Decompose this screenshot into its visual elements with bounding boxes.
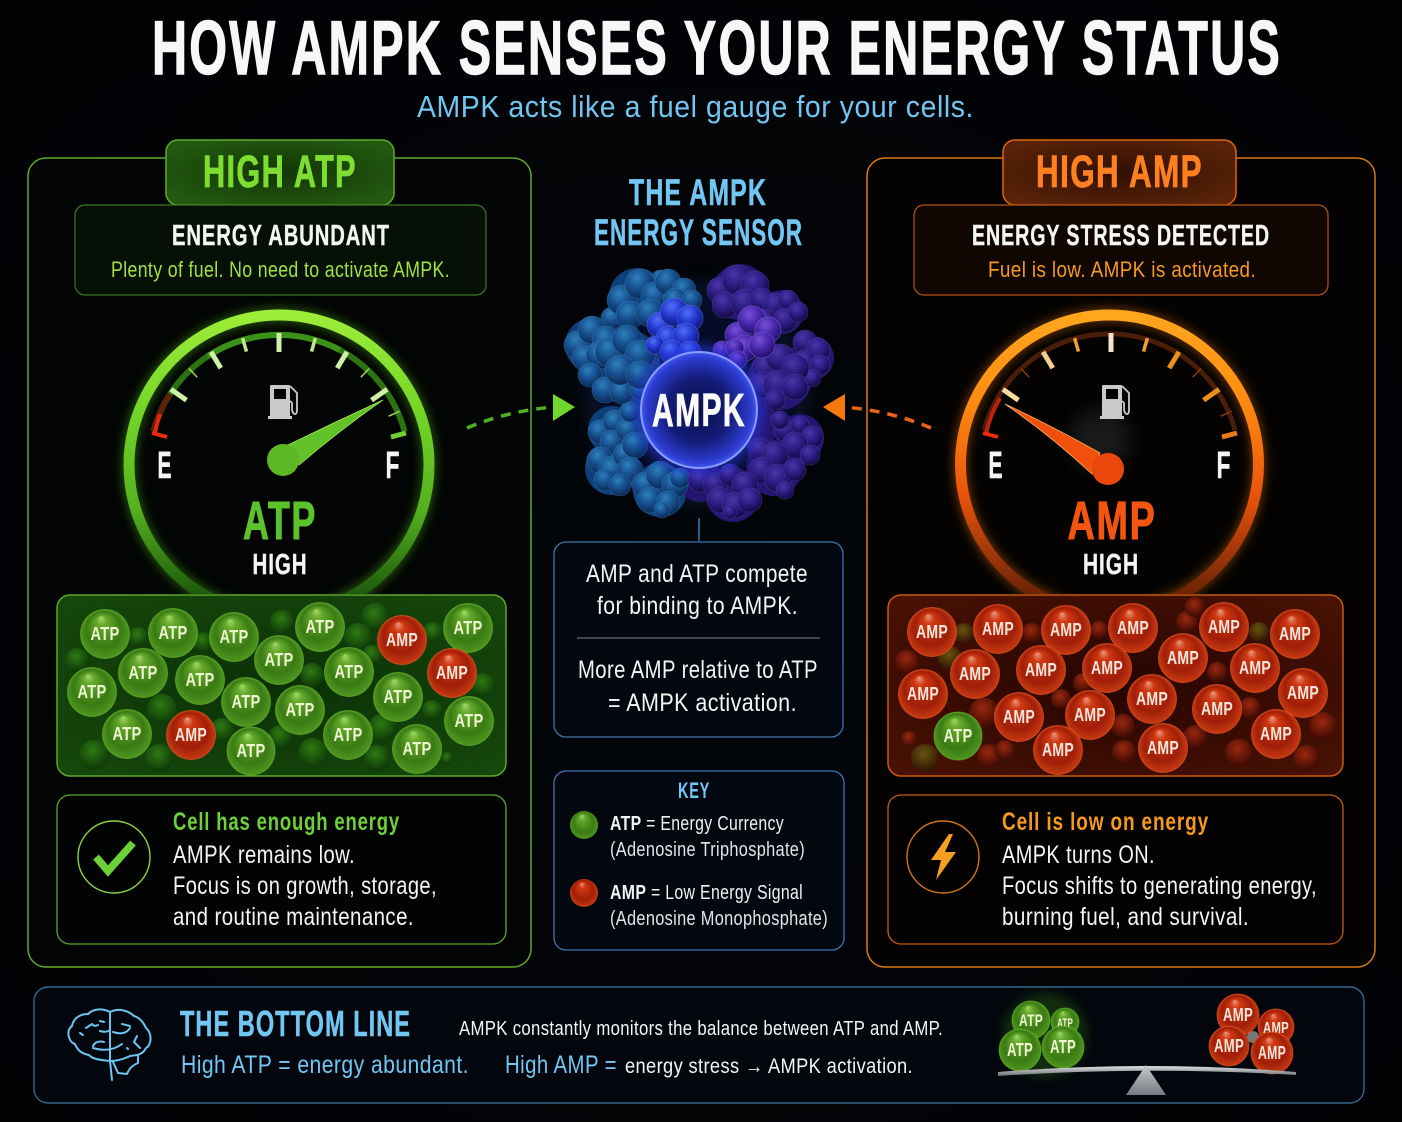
ATP dominated molecule pool: ATP (78, 682, 106, 702)
ATP dominated molecule pool: ATP (334, 725, 362, 745)
ATP dominated molecule pool: ATP (454, 618, 482, 638)
status box: cell is low on energy: burning fuel, and survival. (1002, 903, 1249, 931)
icon: brain (68, 1009, 151, 1080)
ATP dominated molecule pool (57, 595, 506, 776)
status box: cell is low on energy: Cell is low on energy (1002, 808, 1209, 836)
AMP dominated molecule pool: AMP (1074, 705, 1106, 725)
callout: energy stress detected: Fuel is low. AMPK is activated. (988, 257, 1256, 282)
AMP dominated molecule pool: AMP (1287, 683, 1319, 703)
arrow: ATP signal to AMPK (467, 394, 575, 428)
AMP dominated molecule pool: AMP (1147, 738, 1179, 758)
ATP dominated molecule pool: ATP (306, 617, 334, 637)
callout: energy abundant: Plenty of fuel. No need to activate AMPK. (111, 257, 450, 282)
panel: the bottom line (34, 987, 1364, 1103)
heading tab: HIGH AMP (1003, 140, 1236, 205)
ATP dominated molecule pool: ATP (128, 663, 158, 683)
status box: cell has enough energy: Focus is on growth, storage, (173, 872, 437, 900)
status box: cell is low on energy (888, 795, 1343, 944)
panel: the bottom line: THE BOTTOM LINE (180, 1003, 411, 1044)
center heading: ENERGY SENSOR (594, 212, 803, 253)
subtitle: AMPK acts like a fuel gauge for your cells. (417, 89, 974, 124)
AMP dominated molecule pool: AMP (1279, 624, 1311, 644)
panel: high ATP (28, 140, 531, 967)
ATP dominated molecule pool: ATP (158, 623, 188, 643)
ATP dominated molecule pool: ATP (90, 624, 120, 644)
icon: lightning bolt (907, 821, 979, 893)
AMP dominated molecule pool: AMP (1117, 618, 1149, 638)
AMP dominated molecule pool: AMP (1136, 689, 1168, 709)
info box: AMP and ATP compete: More AMP relative to ATP (578, 656, 818, 684)
heading tab: HIGH ATP (166, 140, 394, 205)
ATP dominated molecule pool: ATP (232, 692, 260, 712)
heading tab: HIGH ATP: HIGH ATP (203, 146, 357, 197)
gauge: AMP high: AMP (1068, 491, 1156, 551)
legend item: AMP: AMP = Low Energy Signal (610, 882, 803, 904)
legend item: ATP (570, 811, 805, 861)
AMP dominated molecule pool: AMP (982, 619, 1014, 639)
gauge: ATP high (129, 315, 429, 615)
ATP dominated molecule pool: ATP (384, 687, 412, 707)
center heading (594, 172, 803, 253)
info box: AMP and ATP compete (554, 542, 843, 737)
balance scale: ATP (1057, 1016, 1073, 1030)
AMP dominated molecule pool (888, 595, 1343, 776)
panel: the bottom line: energy stress → AMPK activation. (625, 1055, 913, 1078)
ATP dominated molecule pool: ATP (264, 650, 294, 670)
ATP dominated molecule pool: ATP (334, 662, 364, 682)
AMP dominated molecule pool: ATP (944, 726, 972, 746)
panel: high AMP (867, 140, 1375, 967)
panel: the bottom line: High AMP = (505, 1051, 617, 1079)
AMPK core badge: AMPK (652, 384, 746, 436)
info box: AMP and ATP compete: for binding to AMPK. (597, 592, 798, 620)
gauge: ATP high: E (158, 445, 172, 487)
legend item: ATP: (Adenosine Triphosphate) (610, 839, 805, 861)
ATP dominated molecule pool: ATP (112, 724, 142, 744)
ATP dominated molecule pool: ATP (186, 670, 214, 690)
ATP dominated molecule pool: ATP (220, 627, 248, 647)
legend item: AMP: (Adenosine Monophosphate) (610, 908, 828, 930)
gauge: ATP high: HIGH (252, 549, 308, 581)
callout: energy abundant: ENERGY ABUNDANT (172, 220, 390, 252)
AMP dominated molecule pool: AMP (1239, 658, 1271, 678)
center heading: THE AMPK (629, 172, 767, 213)
heading tab: HIGH AMP: HIGH AMP (1036, 146, 1203, 197)
AMP dominated molecule pool: AMP (1260, 724, 1292, 744)
ATP dominated molecule pool: ATP (286, 700, 314, 720)
gauge: AMP high: HIGH (1083, 549, 1139, 581)
callout: energy stress detected: ENERGY STRESS DETECTED (972, 220, 1270, 252)
balance scale: ATP (1050, 1037, 1076, 1057)
ATP dominated molecule pool: AMP (175, 725, 207, 745)
AMP dominated molecule pool: AMP (1208, 617, 1240, 637)
legend: key: KEY (678, 778, 710, 803)
gauge needle (267, 400, 383, 476)
balance scale: AMP (1263, 1020, 1289, 1037)
AMP dominated molecule pool: AMP (1025, 660, 1057, 680)
callout: energy abundant (75, 205, 486, 295)
gauge: AMP high (960, 315, 1258, 613)
gauge: AMP high: E (988, 445, 1004, 487)
callout: energy stress detected (914, 205, 1328, 295)
AMP dominated molecule pool: AMP (1042, 740, 1074, 760)
arrow: AMP signal to AMPK (823, 394, 931, 428)
balance scale: AMP (1258, 1043, 1286, 1063)
panel: the bottom line: High ATP = energy abundant. (181, 1051, 469, 1079)
gauge: ATP high: F (386, 445, 400, 487)
gauge: ATP high: ATP (243, 491, 317, 551)
info box: AMP and ATP compete: = AMPK activation. (608, 689, 797, 717)
AMP dominated molecule pool: AMP (907, 684, 939, 704)
icon: fuel pump (1100, 385, 1129, 419)
ATP dominated molecule pool: ATP (454, 711, 484, 731)
AMP dominated molecule pool: AMP (1167, 648, 1199, 668)
legend item: ATP: ATP = Energy Currency (610, 813, 784, 835)
balance scale: AMP (1214, 1036, 1244, 1056)
ATP dominated molecule pool: ATP (236, 741, 266, 761)
panel: the bottom line: AMPK constantly monitors the balance between ATP and AMP. (459, 1017, 943, 1040)
status box: cell is low on energy: AMPK turns ON. (1002, 841, 1155, 869)
gauge needle (1005, 404, 1124, 485)
icon: check mark (78, 821, 150, 893)
gauge: AMP high: F (1216, 445, 1232, 487)
AMPK protein sensor (564, 264, 834, 541)
status box: cell has enough energy: and routine maintenance. (173, 903, 414, 931)
status box: cell has enough energy: Cell has enough energy (173, 808, 400, 836)
legend: key (554, 771, 844, 950)
ATP dominated molecule pool: ATP (402, 739, 432, 759)
AMP dominated molecule pool: AMP (1091, 658, 1123, 678)
balance scale: ATP (1019, 1011, 1043, 1030)
balance scale (998, 993, 1296, 1095)
AMP dominated molecule pool: AMP (1003, 707, 1035, 727)
ATP dominated molecule pool: AMP (436, 663, 468, 683)
status box: cell has enough energy (57, 795, 506, 944)
AMP dominated molecule pool: AMP (1201, 699, 1233, 719)
status box: cell is low on energy: Focus shifts to generating energy, (1002, 872, 1317, 900)
balance scale: ATP (1007, 1040, 1033, 1060)
AMP dominated molecule pool: AMP (916, 622, 948, 642)
AMP dominated molecule pool: AMP (959, 664, 991, 684)
info box: AMP and ATP compete: AMP and ATP compete (586, 560, 808, 588)
icon: fuel pump (268, 385, 297, 419)
ATP dominated molecule pool: AMP (386, 630, 418, 650)
status box: cell has enough energy: AMPK remains low. (173, 841, 355, 869)
legend item: AMP (570, 879, 828, 930)
balance scale: AMP (1223, 1005, 1253, 1025)
AMPK core badge (641, 352, 757, 468)
AMP dominated molecule pool: AMP (1050, 620, 1082, 640)
